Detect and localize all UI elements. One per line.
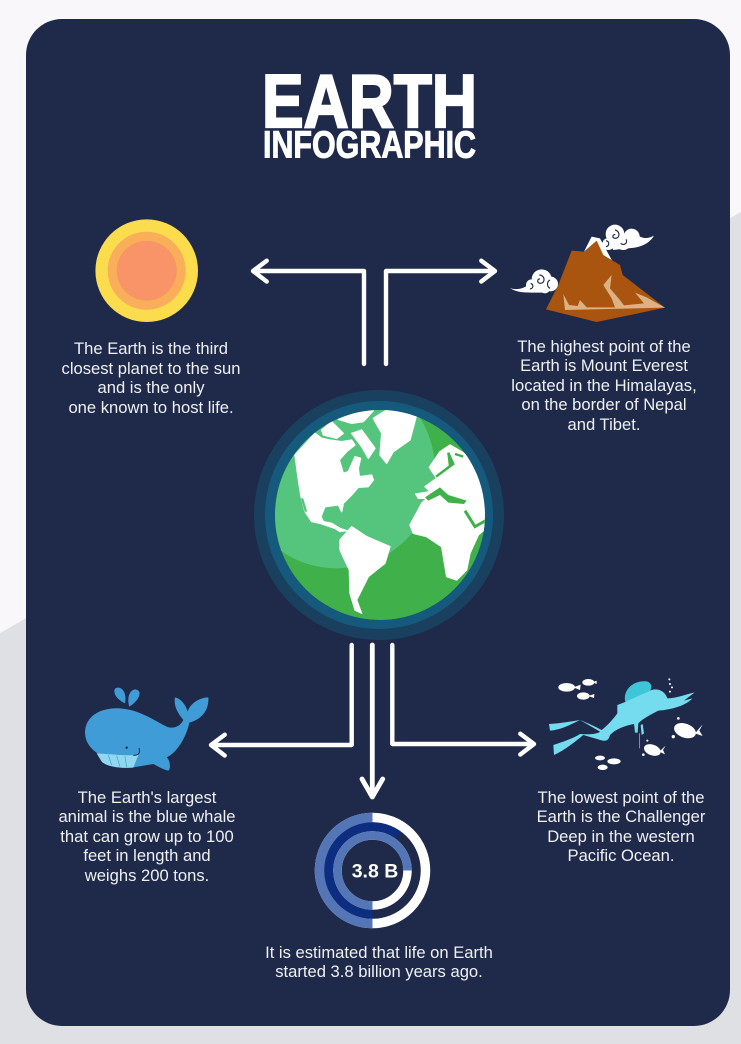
title [262, 59, 477, 166]
text: sun fact: one known to host life. [68, 398, 234, 417]
title: INFOGRAPHIC [263, 124, 476, 166]
text: whale fact [58, 788, 236, 885]
text: sun fact: The Earth is the third [74, 339, 228, 358]
arrow: to diver [392, 645, 534, 754]
text: diver fact: Earth is the Challenger [537, 807, 706, 826]
text: life fact [265, 943, 493, 981]
text: everest fact: on the border of Nepal [521, 395, 687, 414]
text: whale fact: The Earth's largest [78, 788, 217, 807]
icon: diver [549, 678, 703, 770]
chart: 3.8 B ring [320, 818, 426, 924]
text: everest fact: Earth is Mount Everest [520, 356, 688, 375]
text: sun fact: closest planet to the sun [62, 359, 240, 378]
icon: globe [254, 390, 504, 640]
text: whale fact: that can grow up to 100 [60, 827, 234, 846]
text: life fact: started 3.8 billion years ago. [275, 962, 483, 981]
chart: 3.8 B ring: 3.8 B [352, 860, 398, 882]
text: everest fact: and Tibet. [568, 415, 640, 434]
text: whale fact: animal is the blue whale [58, 807, 236, 826]
icon: sun [95, 219, 198, 322]
text: whale fact: feet in length and [83, 846, 211, 865]
text: everest fact [511, 337, 697, 434]
text: sun fact: and is the only [97, 378, 205, 397]
arrow: to life chart [362, 645, 383, 797]
arrow: to whale [211, 645, 352, 756]
text: sun fact [62, 339, 240, 417]
text: everest fact: located in the Himalayas, [511, 376, 697, 395]
text: diver fact [537, 788, 706, 865]
arrow: to sun [253, 261, 364, 364]
icon: mountain [510, 225, 665, 322]
arrow: to mountain [386, 261, 495, 364]
title: EARTH [262, 59, 477, 143]
text: everest fact: The highest point of the [517, 337, 691, 356]
icon: whale [85, 688, 208, 771]
text: whale fact: weighs 200 tons. [84, 866, 209, 885]
text: diver fact: Pacific Ocean. [568, 846, 674, 865]
text: diver fact: The lowest point of the [538, 788, 704, 807]
text: life fact: It is estimated that life on Earth [265, 943, 493, 962]
text: diver fact: Deep in the western [547, 827, 695, 846]
